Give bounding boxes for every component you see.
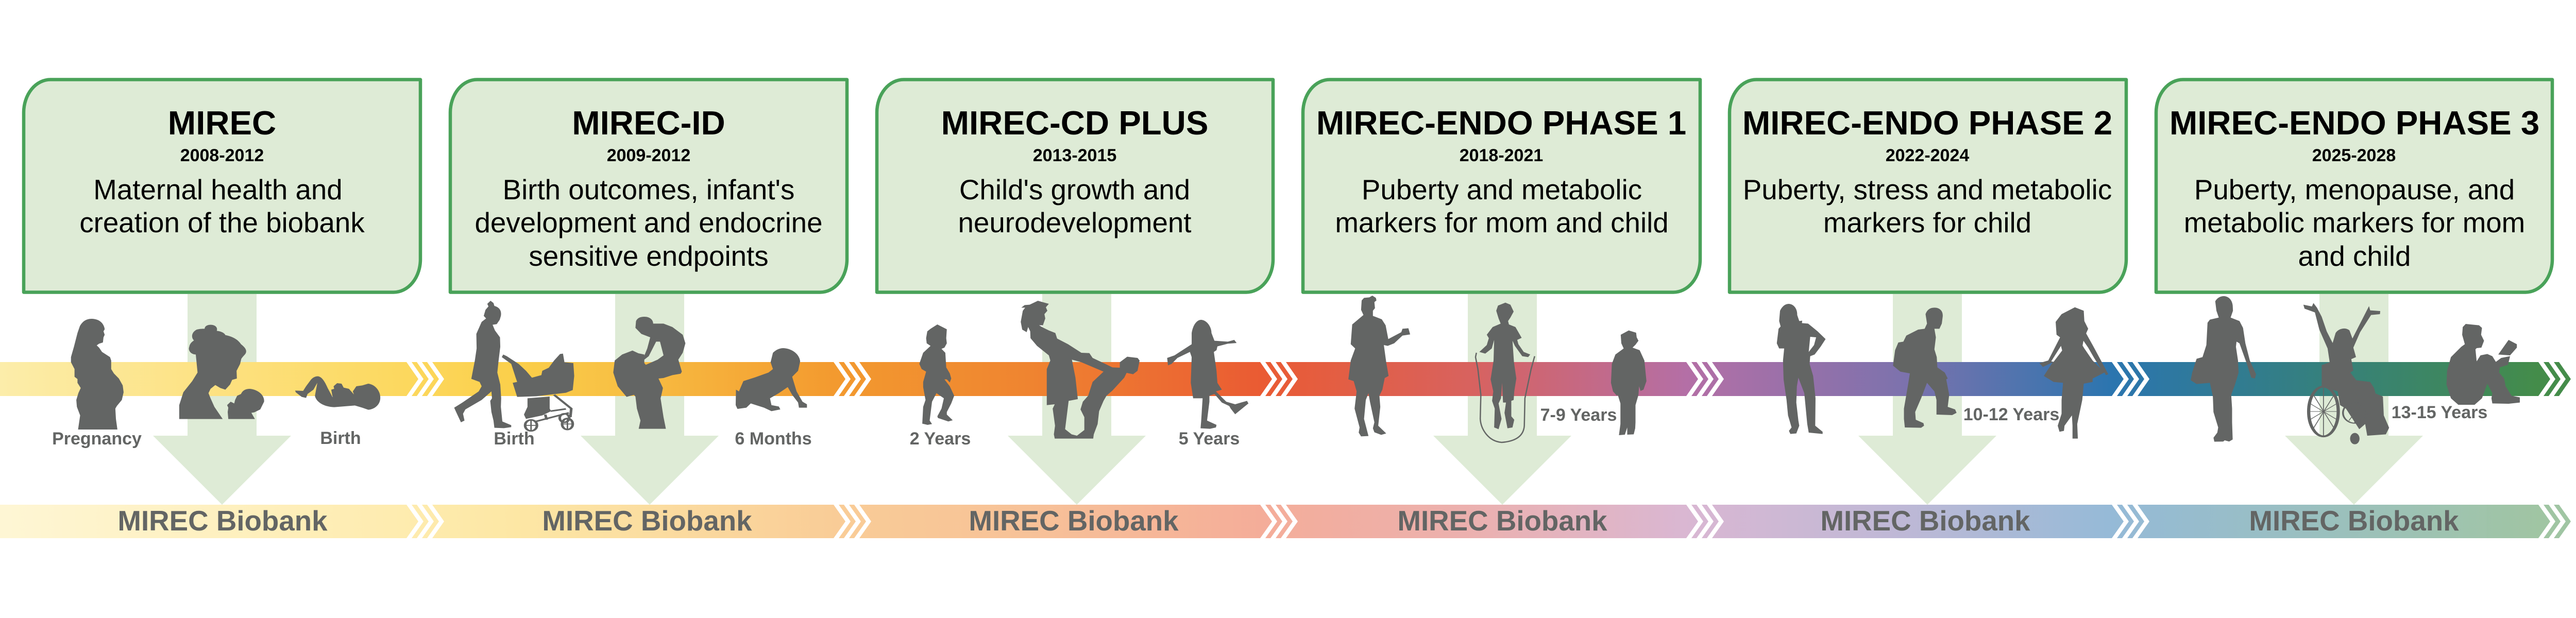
arrow: MIREC-ENDO 3 to biobank bbox=[2285, 294, 2423, 505]
description: MIREC-ENDO PHASE 3: metabolic markers for mom bbox=[2184, 207, 2525, 238]
description: MIREC-ENDO PHASE 2: markers for child bbox=[1823, 207, 2031, 238]
icon: woman hand on hip bbox=[1777, 304, 1825, 434]
panel: MIREC-ENDO PHASE 3 bbox=[2156, 79, 2552, 293]
heading: MIREC-ENDO PHASE 1: MIREC-ENDO PHASE 1 bbox=[1316, 104, 1686, 142]
panel: MIREC bbox=[24, 79, 420, 293]
panel: MIREC-ENDO PHASE 1 bbox=[1303, 79, 1700, 293]
icon: woman standing with cup bbox=[1348, 296, 1410, 436]
timeline band with chevrons bbox=[0, 362, 2571, 396]
arrow: MIREC to biobank bbox=[153, 294, 291, 505]
icon: woman with handbag bbox=[2191, 296, 2256, 442]
arrow: MIREC-CD PLUS to biobank bbox=[1008, 294, 1146, 505]
arrow: MIREC-ID to biobank bbox=[581, 294, 719, 505]
biobank label 2: MIREC Biobank bbox=[542, 505, 752, 537]
label: 10-12 Years: 10-12 Years bbox=[1963, 405, 2059, 424]
icon: woman with stroller bbox=[454, 301, 574, 431]
description: MIREC-ID: development and endocrine bbox=[475, 207, 822, 238]
icon: girl dancing bbox=[1167, 320, 1248, 429]
description: MIREC-ENDO PHASE 1: Puberty and metabolic bbox=[1362, 174, 1642, 205]
icon: teen in wheelchair bbox=[2303, 303, 2389, 444]
icon: child skipping rope bbox=[1476, 303, 1535, 442]
panel: MIREC-ID bbox=[450, 79, 847, 293]
description: MIREC-ID: sensitive endpoints bbox=[529, 240, 769, 272]
description: MIREC: creation of the biobank bbox=[79, 207, 365, 238]
icon: pregnant woman bbox=[71, 319, 124, 430]
description: MIREC-CD PLUS: Child's growth and bbox=[959, 174, 1190, 205]
heading: MIREC-ENDO PHASE 2: MIREC-ENDO PHASE 2 bbox=[1742, 104, 2112, 142]
biobank label 5: MIREC Biobank bbox=[1820, 505, 2030, 537]
label: 7-9 Years: 7-9 Years bbox=[1540, 405, 1617, 425]
heading: MIREC-CD PLUS: MIREC-CD PLUS bbox=[941, 104, 1208, 142]
icon: woman lifting child bbox=[613, 317, 685, 429]
biobank band with chevrons bbox=[0, 505, 2571, 538]
icon: mother playing with child bbox=[1021, 301, 1140, 439]
arrow: MIREC-ENDO 2 to biobank bbox=[1858, 294, 1996, 505]
description: MIREC-ENDO PHASE 3: and child bbox=[2298, 240, 2411, 272]
icon: mother and newborn bbox=[179, 325, 264, 419]
label: 2 Years: 2 Years bbox=[910, 429, 971, 449]
label: Birth (MIREC): Birth bbox=[320, 428, 361, 448]
label: 13-15 Years: 13-15 Years bbox=[2392, 403, 2487, 422]
heading: MIREC-ENDO PHASE 3: MIREC-ENDO PHASE 3 bbox=[2170, 104, 2539, 142]
heading: MIREC-ID: MIREC-ID bbox=[572, 104, 725, 142]
description: MIREC-ID: Birth outcomes, infant's bbox=[503, 174, 794, 205]
biobank label 4: MIREC Biobank bbox=[1397, 505, 1607, 537]
label: Birth (MIREC-ID): Birth bbox=[494, 429, 535, 449]
label: Pregnancy: Pregnancy bbox=[52, 429, 142, 449]
description: MIREC-CD PLUS: neurodevelopment bbox=[958, 207, 1192, 238]
description: MIREC-ENDO PHASE 3: Puberty, menopause, and bbox=[2194, 174, 2515, 205]
panel: MIREC-CD PLUS bbox=[877, 79, 1273, 293]
years: 2018-2021: 2018-2021 bbox=[1460, 146, 1543, 165]
description: MIREC-ENDO PHASE 1: markers for mom and child bbox=[1335, 207, 1669, 238]
icon: baby lying bbox=[295, 376, 380, 410]
icon: toddler walking bbox=[919, 324, 954, 425]
label: 6 Months: 6 Months bbox=[735, 429, 812, 449]
years: 2022-2024: 2022-2024 bbox=[1886, 146, 1969, 165]
biobank label 6: MIREC Biobank bbox=[2249, 505, 2459, 537]
icon: boy with backpack bbox=[1893, 307, 1957, 428]
panel: MIREC-ENDO PHASE 2 bbox=[1730, 79, 2126, 293]
biobank label 1: MIREC Biobank bbox=[117, 505, 328, 537]
label: 5 Years: 5 Years bbox=[1179, 429, 1240, 449]
heading: MIREC: MIREC bbox=[168, 104, 276, 142]
biobank label 3: MIREC Biobank bbox=[969, 505, 1179, 537]
years: 2025-2028: 2025-2028 bbox=[2312, 146, 2396, 165]
description: MIREC-ENDO PHASE 2: Puberty, stress and metabolic bbox=[1743, 174, 2112, 205]
icon: girl in dress bbox=[2039, 307, 2108, 439]
arrow: MIREC-ENDO 1 to biobank bbox=[1433, 294, 1571, 505]
icon: teen reading bbox=[2447, 324, 2520, 405]
years: 2008-2012: 2008-2012 bbox=[180, 146, 264, 165]
description: MIREC: Maternal health and bbox=[93, 174, 343, 205]
years: 2009-2012: 2009-2012 bbox=[607, 146, 690, 165]
years: 2013-2015: 2013-2015 bbox=[1033, 146, 1116, 165]
icon: child standing bbox=[1611, 331, 1647, 435]
icon: crawling baby bbox=[736, 348, 807, 411]
